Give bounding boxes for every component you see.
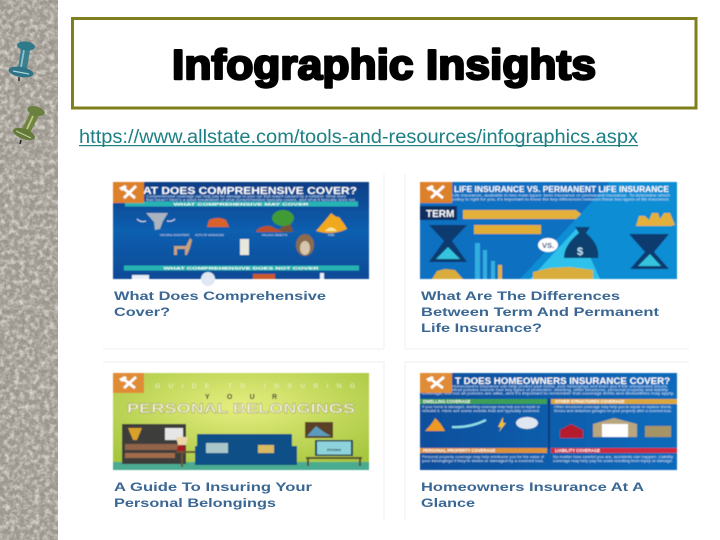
red band	[551, 448, 677, 453]
green band	[420, 399, 547, 404]
orange band	[420, 448, 547, 453]
panel: life insurance card	[405, 174, 689, 349]
thumbnail: homeowners insurance	[420, 373, 677, 470]
bars	[475, 243, 480, 279]
thumbnail: comprehensive cover: FALLING OBJECTS	[262, 233, 287, 237]
thumbnail: term vs permanent: LIFE INSURANCE VS. PERMANENT LIFE INSURANCE	[454, 185, 670, 194]
icon: orange tools badge	[420, 373, 452, 393]
icon: people	[636, 213, 675, 226]
icon: orange tools badge	[113, 373, 144, 393]
icon: canister	[240, 239, 249, 255]
icon: car	[207, 218, 229, 227]
caption: Homeowners Insurance At A	[421, 480, 644, 494]
caption	[114, 289, 326, 319]
caption: Glance	[421, 496, 475, 510]
thumbnail: personal belongings: GUIDE TO INSURING	[155, 383, 355, 390]
gold arrow	[463, 210, 581, 219]
thumbnail: personal belongings: PERSONAL BELONGINGS	[127, 400, 355, 416]
icon: wind	[452, 420, 486, 427]
thumbnail: comprehensive cover: that mean? Here's a quick breakdown of what comprehensive typically covers, and what it typically does not.	[146, 198, 356, 202]
thumbnail: comprehensive cover: WHAT COMPREHENSIVE MAY COVER	[174, 202, 309, 207]
caption: Cover?	[114, 305, 170, 319]
icon: fence	[645, 426, 671, 437]
vs bubble	[538, 238, 558, 252]
icon: barn	[560, 424, 583, 438]
icon: orange tools badge	[420, 182, 452, 203]
caption	[421, 289, 659, 335]
thumbnail: homeowners insurance: LIABILITY COVERAGE	[555, 448, 600, 453]
thumbnail: personal belongings	[113, 373, 369, 470]
thumbnail: homeowners insurance: coverage may help pay for costs resulting from injury or damage.	[553, 459, 673, 463]
thumbnail: homeowners insurance: OTHER STRUCTURES COVERAGE	[555, 399, 625, 404]
thumbnail: homeowners insurance: Most policies include four key types of protection: dwelling, other structures, personal property and liability	[452, 388, 668, 392]
thumbnail: homeowners insurance: DWELLING COVERAGE	[423, 399, 471, 404]
panel: belongings card	[103, 362, 384, 520]
icon: fire	[425, 418, 445, 431]
shelf	[122, 424, 186, 464]
sofa	[195, 434, 297, 465]
icon: green push pin	[11, 104, 46, 144]
thumbnail: homeowners insurance: your belongings if they're stolen or damaged by a covered loss.	[422, 459, 544, 463]
icon: hail cloud	[516, 417, 538, 429]
term label	[420, 206, 457, 220]
thumbnail: homeowners insurance: fences and detached garages on your property after a covered loss.	[554, 409, 672, 413]
caption	[421, 480, 644, 510]
title box	[72, 18, 696, 108]
icon: fire	[316, 213, 347, 233]
thumbnail: homeowners insurance: No matter how careful you are, accidents can happen. Liability	[553, 455, 673, 459]
thumbnail: personal belongings: Allstate	[327, 447, 342, 452]
thumbnail: homeowners insurance: coverage, but not all policies are alike, and it's important to remember that coverage limits and deductibles may apply.	[422, 392, 674, 396]
source link: https://www.allstate.com/tools-and-resources/infographics.aspx	[79, 127, 639, 148]
thumbnail: term vs permanent: policy is right for you, it's important to know the key differences between these two types of life insurance.	[452, 198, 670, 202]
thumbnail: term vs permanent	[420, 182, 677, 279]
caption: Life Insurance?	[421, 321, 542, 335]
lamp	[176, 437, 188, 445]
thumbnail: homeowners insurance: rebuild it. Here are some events that are typically covered.	[422, 409, 540, 413]
picture frame	[305, 422, 333, 438]
icon: garage	[593, 418, 637, 437]
panel: homeowners card	[405, 362, 689, 520]
thumbnail: personal belongings: YOUR	[205, 394, 277, 401]
thumbnail: comprehensive cover: FIRE	[328, 233, 335, 237]
icon: orange tools badge	[113, 182, 144, 203]
caption: Personal Belongings	[114, 496, 276, 510]
icon: money bag	[564, 227, 598, 258]
tv	[315, 440, 353, 456]
icon: owl	[296, 234, 314, 256]
panel: comprehensive card	[103, 174, 384, 349]
icon: deer	[174, 238, 192, 255]
thumbnail: comprehensive cover: AT DOES COMPREHENSIVE COVER?	[143, 185, 357, 197]
icon: hourglass right	[629, 234, 669, 269]
thumbnail: term vs permanent: TERM	[426, 209, 454, 220]
vs bubble: VS.	[542, 241, 554, 250]
icon: hourglass left	[429, 225, 467, 262]
icon: tree on car	[270, 222, 293, 232]
thumbnail: homeowners insurance: PERSONAL PROPERTY COVERAGE	[423, 448, 496, 453]
icon: teal push pin	[8, 40, 36, 81]
caption: Between Term And Permanent	[421, 305, 659, 319]
caption: A Guide To Insuring Your	[114, 480, 312, 494]
gold band	[551, 399, 677, 404]
granite sidebar	[0, 0, 58, 540]
thumbnail: comprehensive cover: WHAT COMPREHENSIVE DOES NOT COVER	[164, 266, 319, 271]
icon: lightning	[498, 417, 506, 432]
thumbnail: term vs permanent: Life insurance, available in two main types: term insurance or permanent insurance. To determine which	[452, 194, 670, 198]
thumbnail: homeowners insurance: Other structures coverage may help you to repair or replace sheds,	[554, 405, 672, 409]
gold houses	[533, 267, 593, 279]
icon: money bag: $	[577, 246, 583, 258]
gold coins row	[474, 225, 541, 234]
title: Infographic Insights	[172, 41, 596, 88]
tv stand	[306, 457, 362, 459]
caption: What Does Comprehensive	[114, 289, 326, 303]
thumbnail: homeowners insurance: Personal property coverage may help reimburse you for the value of	[422, 455, 544, 459]
thumbnail: comprehensive cover	[113, 182, 369, 286]
caption	[114, 480, 312, 510]
thumbnail: homeowners insurance: T DOES HOMEOWNERS INSURANCE COVER?	[455, 376, 670, 386]
thumbnail: comprehensive cover: NATURAL DISASTERS	[160, 233, 190, 237]
caption: What Are The Differences	[421, 289, 620, 303]
thumbnail: comprehensive cover: Comprehensive coverage can help pay for damage to your car that wasn't caused by a collision. What does	[146, 194, 346, 198]
thumbnail: comprehensive cover: ACTS OF VANDALISM	[195, 233, 225, 237]
icon: tornado	[146, 213, 168, 230]
thumbnail: homeowners insurance: If your home is damaged, dwelling coverage may help you to repair or	[422, 405, 541, 409]
thumbnail: homeowners insurance: Homeowners insurance can help protect your home, your belongings and even you if the unexpected occurs.	[452, 384, 668, 388]
